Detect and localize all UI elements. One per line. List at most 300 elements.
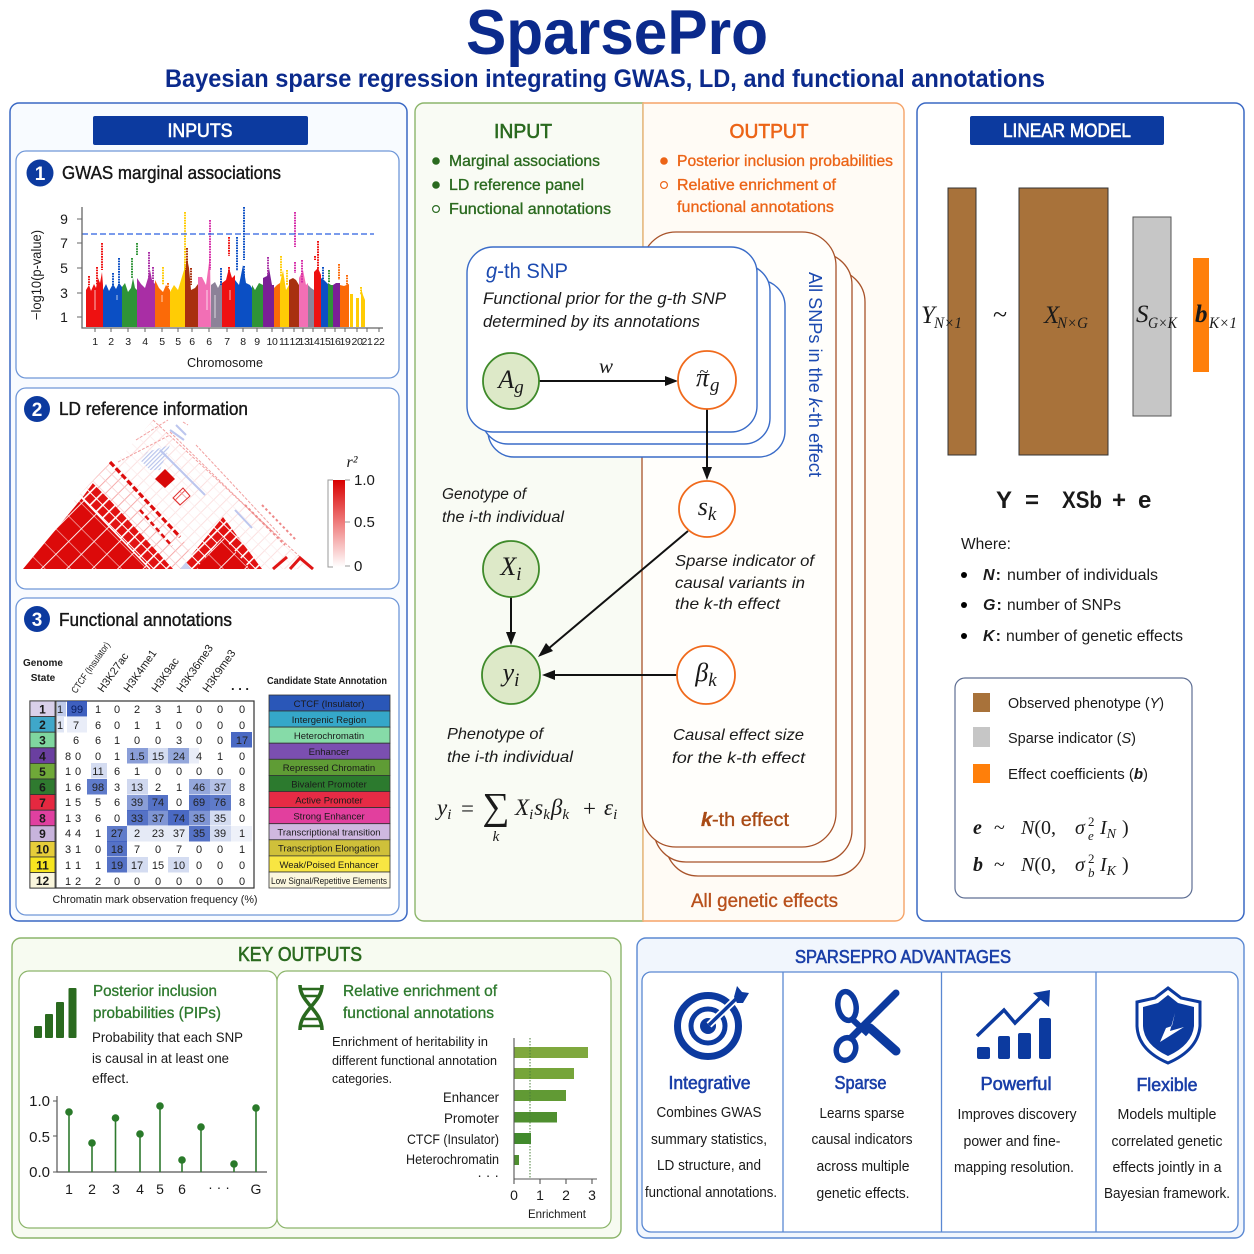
heatmap values: 4 xyxy=(196,751,202,763)
text: functional prior: determined by its annotations xyxy=(483,312,700,331)
chart: lollipop xyxy=(29,1093,267,1197)
chart: lollipop: 1.0 xyxy=(29,1093,50,1110)
heatmap values: 0 xyxy=(114,876,120,888)
icon: scissors xyxy=(833,990,896,1063)
equation: Y = XSb + e: + xyxy=(1112,487,1126,514)
equation: Y = XSb + e: XSb xyxy=(1062,487,1102,514)
heatmap values: 0 xyxy=(239,876,245,888)
arrow: A to pi xyxy=(539,376,678,386)
chart: lollipop: G xyxy=(251,1181,261,1197)
chart: Manhattan plot: 10 xyxy=(267,336,278,348)
chart: enrichment bars: 1 xyxy=(536,1187,544,1203)
icon: target xyxy=(678,986,749,1056)
chart: Manhattan plot: 5 xyxy=(159,336,165,348)
chart: Manhattan plot: 5 xyxy=(175,336,181,348)
heatmap values: 0 xyxy=(217,860,223,872)
panel: GWAS marginal associations xyxy=(16,151,399,378)
description: PIPs: is causal in at least one xyxy=(92,1050,229,1066)
heatmap values: 0 xyxy=(217,735,223,747)
caption: sparse indicator: the k-th effect xyxy=(675,596,781,613)
heatmap values: 0 xyxy=(196,720,202,732)
heatmap values: 39 xyxy=(214,828,226,840)
caption: genotype: the i-th individual xyxy=(442,509,565,526)
heatmap values: 1 xyxy=(114,735,120,747)
genome state label xyxy=(23,658,63,684)
label: k-th effect: k-th effect xyxy=(701,810,790,831)
candidate state annotation list: Strong Enhancer xyxy=(293,812,365,822)
heatmap values: 0 xyxy=(217,704,223,716)
heatmap values: 0 xyxy=(196,860,202,872)
equation: y_i sum: k xyxy=(562,807,569,823)
arrow: beta to y xyxy=(542,670,677,680)
distribution: b xyxy=(973,851,1129,880)
chart: Manhattan plot: 5 xyxy=(60,260,68,276)
chart: Manhattan plot: 21 xyxy=(362,336,373,348)
caption: phenotype: Phenotype of xyxy=(447,726,545,743)
node: A_g: g xyxy=(514,377,524,398)
chart: enrichment bars: Enrichment xyxy=(528,1207,587,1221)
chart: Manhattan plot: 3 xyxy=(60,285,68,301)
column: integrative: Integrative xyxy=(668,1073,750,1093)
caption: phenotype xyxy=(447,726,573,766)
chromatin mark column labels: H3K27ac xyxy=(96,650,132,695)
heatmap values: 3 xyxy=(155,704,161,716)
chart: lollipop: 0.0 xyxy=(29,1164,50,1181)
node: A_g xyxy=(483,353,539,409)
column: sparse: genetic effects. xyxy=(816,1186,910,1202)
heatmap values xyxy=(57,704,248,888)
chromatin mark column labels: H3K36me3 xyxy=(175,643,216,695)
heatmap values: 19 xyxy=(111,860,123,872)
equation: Y = XSb + e: e xyxy=(1138,487,1151,514)
candidate state annotation list xyxy=(269,695,390,888)
column: powerful: Powerful xyxy=(980,1074,1052,1094)
heatmap values: 2 xyxy=(155,782,161,794)
heading: LD: LD reference information xyxy=(59,399,248,419)
equation: y_i sum: β xyxy=(550,795,563,820)
heatmap values: 0 xyxy=(196,876,202,888)
heatmap values: 0 xyxy=(155,735,161,747)
heatmap values: 1 xyxy=(239,828,245,840)
heatmap values: 6 xyxy=(95,720,101,732)
column: sparse: Sparse xyxy=(834,1073,886,1093)
chart: enrichment bars: Enhancer xyxy=(443,1089,499,1105)
equation: y_i sum xyxy=(435,786,617,845)
heatmap values: 1 xyxy=(57,704,63,716)
distribution: b: σ xyxy=(1075,854,1086,876)
chart: enrichment bars: 2 xyxy=(562,1187,570,1203)
heatmap values: 1 xyxy=(155,720,161,732)
chart: Manhattan plot: 11 xyxy=(279,336,290,348)
description: PIPs: effect. xyxy=(92,1070,129,1086)
panel: graphical model xyxy=(415,103,904,921)
chromatin mark column labels: H3K4me1 xyxy=(122,648,160,695)
candidate state annotation list: Repressed Chromatin xyxy=(283,763,375,774)
state number cells: 7 xyxy=(39,796,46,810)
equation: Y = XSb + e: = xyxy=(1025,487,1039,514)
equation: y_i sum: i xyxy=(447,807,451,823)
matrix S xyxy=(1133,217,1171,416)
chart: lollipop: 5 xyxy=(156,1181,164,1197)
distribution: b: b xyxy=(973,854,983,876)
chart: Manhattan plot: 2 xyxy=(108,336,114,348)
equation: y_i sum: ε xyxy=(604,795,613,820)
heatmap values: 6 xyxy=(95,735,101,747)
icon: rising chart xyxy=(977,990,1051,1059)
heatmap values: 1 xyxy=(217,751,223,763)
chart: enrichment bars: · · · xyxy=(477,1167,499,1183)
equation: y_i sum: + xyxy=(583,796,596,821)
heatmap values: 0 xyxy=(196,844,202,856)
legend: r squared colourbar: 0 xyxy=(354,558,362,575)
chart: Manhattan plot: 22 xyxy=(374,336,385,348)
heatmap values: 3 xyxy=(75,813,81,825)
heatmap values: 33 xyxy=(131,813,143,825)
chart: enrichment bars: 3 xyxy=(588,1187,596,1203)
legend: r squared colourbar: 0.5 xyxy=(354,514,375,531)
matrix X xyxy=(1019,188,1108,455)
output list xyxy=(660,121,893,216)
heatmap values: 18 xyxy=(111,844,123,856)
distribution: e: N(0, xyxy=(1020,817,1056,839)
heatmap values: 76 xyxy=(214,797,226,809)
node: beta_k: β xyxy=(695,658,708,687)
description: enrichment: different functional annotation xyxy=(332,1053,497,1068)
heading: GWAS: GWAS marginal associations xyxy=(62,163,281,183)
chart: Manhattan plot: 1 xyxy=(92,336,98,348)
chart: enrichment bars: CTCF (Insulator) xyxy=(407,1131,499,1147)
candidate state annotation list: Active Promoter xyxy=(295,796,363,806)
heatmap values: 15 xyxy=(152,751,164,763)
node: pi_g: ~ xyxy=(699,362,709,381)
heatmap values: 3 xyxy=(114,782,120,794)
heatmap values: 1 xyxy=(239,844,245,856)
subtitle: Bayesian sparse regression integrating GWAS, LD, and functional annotations xyxy=(165,65,1045,93)
card: relative enrichment xyxy=(277,971,611,1228)
heatmap values: 69 xyxy=(193,797,205,809)
matrix labels: b xyxy=(1195,301,1208,328)
heatmap values: 0 xyxy=(196,704,202,716)
heatmap values: 8 xyxy=(65,751,71,763)
plate: all genetic effects xyxy=(642,232,865,876)
label: all SNPs vertical: All SNPs in the k -th effect xyxy=(805,272,825,477)
column: sparse xyxy=(812,990,912,1202)
heatmap values: 4 xyxy=(75,828,81,840)
node: pi_g: π xyxy=(696,363,710,392)
legend box: Observed phenotype (Y) xyxy=(1008,695,1164,712)
chart: Manhattan plot: 12 xyxy=(290,336,301,348)
panel: inputs xyxy=(10,103,407,921)
chart: enrichment bars: 0 xyxy=(510,1187,518,1203)
candidate state annotation list: Low Signal/Repetitive Elements xyxy=(271,876,387,887)
number badge 3: 3 xyxy=(32,610,42,631)
state number cells: 9 xyxy=(39,827,46,841)
chart: Manhattan plot: 16 xyxy=(330,336,341,348)
legend box: Sparse indicator (S) xyxy=(1008,730,1136,747)
output list: Relative enrichment of xyxy=(677,177,837,194)
panel: linear model xyxy=(917,103,1244,921)
inputs header: INPUTS xyxy=(168,121,232,142)
node: X_i: X xyxy=(500,552,516,581)
distribution: b: 2 xyxy=(1088,851,1094,866)
heatmap values: 3 xyxy=(65,844,71,856)
text: functional prior: Functional prior for the g-th SNP xyxy=(483,289,727,308)
card: posterior inclusion probabilities xyxy=(19,971,277,1228)
chart: Manhattan plot: 1 xyxy=(60,309,68,325)
chart: enrichment bars: Promoter xyxy=(444,1110,499,1126)
legend: r squared colourbar: r² xyxy=(346,454,359,471)
heatmap values: 13 xyxy=(131,782,143,794)
chart: Manhattan plot: 3 xyxy=(125,336,131,348)
label: all genetic effects: All genetic effects xyxy=(691,891,838,912)
column: powerful: Improves discovery xyxy=(958,1107,1077,1123)
matrix labels: G×K xyxy=(1148,315,1178,332)
number badge 1: 1 xyxy=(35,164,46,185)
node: y_i xyxy=(482,646,540,704)
heatmap table xyxy=(30,701,254,888)
heatmap values: 0 xyxy=(217,844,223,856)
chromatin mark column labels: H3K9me3 xyxy=(201,648,239,695)
heatmap values: 35 xyxy=(193,828,205,840)
candidate state annotation list: Transcription Elongation xyxy=(278,844,380,854)
axis label: chromosome: Chromosome xyxy=(187,355,263,370)
definitions list: number of genetic effects xyxy=(1006,628,1183,645)
definitions list: number of SNPs xyxy=(1007,597,1121,614)
caption: genotype xyxy=(442,486,565,526)
description: PIPs: Probability that each SNP xyxy=(92,1029,243,1045)
chart: Manhattan plot: 19 xyxy=(340,336,351,348)
heatmap values: 6 xyxy=(95,813,101,825)
panel: advantages xyxy=(637,938,1244,1238)
column: sparse: Learns sparse xyxy=(820,1106,904,1122)
matrix labels: S xyxy=(1136,301,1149,328)
heatmap values: 23 xyxy=(152,828,164,840)
state number cells: 5 xyxy=(39,765,46,779)
node: beta_k: k xyxy=(708,670,717,691)
column: integrative: LD structure, and xyxy=(657,1158,761,1174)
definitions list: K: xyxy=(983,628,1001,645)
heatmap values: 8 xyxy=(239,797,245,809)
number badge 3 xyxy=(24,606,50,632)
heatmap values: 4 xyxy=(65,828,71,840)
inputs header xyxy=(93,116,308,145)
heatmap values: 15 xyxy=(152,860,164,872)
heatmap values: 0 xyxy=(239,813,245,825)
title: SparsePro xyxy=(466,0,768,68)
label: w: w xyxy=(599,354,613,378)
legend: r squared colourbar: 1.0 xyxy=(354,472,375,489)
state number cells: 6 xyxy=(39,780,46,794)
chromatin mark column labels: H3K9ac xyxy=(150,655,182,695)
distribution: b: ) xyxy=(1122,854,1129,876)
heatmap values: 0 xyxy=(95,751,101,763)
heatmap values: 6 xyxy=(73,735,79,747)
chart: Manhattan plot: 9 xyxy=(254,336,260,348)
caption: causal effect size xyxy=(672,727,806,767)
heatmap values: 0 xyxy=(155,766,161,778)
caption: genotype: Genotype of xyxy=(442,486,528,503)
chart: lollipop: · · · xyxy=(208,1179,230,1195)
heatmap values: 17 xyxy=(236,735,248,747)
heatmap values: 5 xyxy=(95,797,101,809)
panel: functional annotations xyxy=(16,598,399,915)
legend box: Effect coefficients (b) xyxy=(1008,766,1148,783)
heatmap values: 37 xyxy=(173,828,185,840)
description: enrichment xyxy=(332,1034,497,1086)
equation: y_i sum: k xyxy=(543,807,550,823)
chromatin mark column labels: . . . xyxy=(231,678,249,693)
distribution: b: N(0, xyxy=(1020,854,1056,876)
input list: Functional annotations xyxy=(449,201,611,218)
icon: DNA xyxy=(299,985,323,1030)
heatmap values: 1 xyxy=(95,860,101,872)
heatmap values: 8 xyxy=(239,782,245,794)
candidate state annotation list: Weak/Poised Enhancer xyxy=(279,860,379,871)
heatmap values: 27 xyxy=(111,828,123,840)
chart: Manhattan plot: 6 xyxy=(206,336,212,348)
chart: Manhattan plot: 20 xyxy=(352,336,363,348)
heatmap values: 11 xyxy=(92,766,104,778)
heatmap values: 1 xyxy=(65,860,71,872)
heatmap values: 3 xyxy=(176,735,182,747)
column: integrative: functional annotations. xyxy=(645,1185,777,1201)
heatmap values: 1 xyxy=(65,766,71,778)
equation: y_i sum: X xyxy=(515,795,529,820)
heading: PIPs: probabilities (PIPs) xyxy=(93,1005,221,1022)
heatmap values: 0 xyxy=(239,860,245,872)
heatmap values: 0 xyxy=(114,704,120,716)
definitions list: Where: xyxy=(961,536,1011,553)
description: enrichment: categories. xyxy=(332,1071,392,1086)
candidate state annotation list: CTCF (Insulator) xyxy=(294,699,364,710)
matrix labels: X xyxy=(1043,302,1061,329)
arrow: X to y xyxy=(506,597,516,645)
node: s_k: k xyxy=(708,504,717,525)
chart: lollipop: 1 xyxy=(65,1181,73,1197)
heatmap values: 7 xyxy=(176,844,182,856)
number badge 2 xyxy=(24,396,50,422)
equation: Y = XSb + e: Y xyxy=(996,487,1012,514)
heatmap values: 1 xyxy=(134,766,140,778)
node: beta_k xyxy=(677,646,735,704)
node: A_g: A xyxy=(498,365,514,394)
chart: Manhattan plot: 8 xyxy=(240,336,246,348)
chart: Manhattan plot: 15 xyxy=(320,336,331,348)
heatmap values: 6 xyxy=(114,797,120,809)
distribution: e: N xyxy=(1106,827,1117,842)
icon: shield xyxy=(1137,988,1200,1063)
node: pi_g xyxy=(678,351,736,409)
column: flexible: Models multiple xyxy=(1118,1107,1216,1123)
heatmap values: 0 xyxy=(217,876,223,888)
distribution: e: ~ xyxy=(994,817,1005,839)
state number cells: 12 xyxy=(36,874,49,888)
chromatin mark column labels xyxy=(69,640,249,696)
matrix labels xyxy=(921,300,1237,332)
chart: Manhattan plot: 9 xyxy=(60,211,68,227)
state number cells xyxy=(30,701,55,888)
significance line xyxy=(82,233,374,235)
heatmap values: 0 xyxy=(134,876,140,888)
heatmap values: 2 xyxy=(75,876,81,888)
distribution: b: b xyxy=(1088,865,1095,880)
heatmap values: 1 xyxy=(114,751,120,763)
input list: Marginal associations xyxy=(449,153,600,170)
heatmap values: 17 xyxy=(131,860,143,872)
heatmap values: 1 xyxy=(95,828,101,840)
node: X_i xyxy=(483,541,539,597)
heatmap values: 2 xyxy=(134,704,140,716)
heatmap values: 39 xyxy=(131,797,143,809)
distribution: e xyxy=(973,814,1129,843)
heatmap values: 98 xyxy=(92,782,104,794)
linear model header: LINEAR MODEL xyxy=(1003,121,1131,142)
heatmap values: 0 xyxy=(114,813,120,825)
heatmap values: 0 xyxy=(134,735,140,747)
heatmap values: 0 xyxy=(239,720,245,732)
heatmap values: 1 xyxy=(57,720,63,732)
chart: Manhattan plot: 7 xyxy=(60,235,68,251)
candidate state annotation list: Bivalent Promoter xyxy=(291,780,367,790)
matrix labels: ~ xyxy=(993,300,1007,329)
chart: enrichment bars: Heterochromatin xyxy=(406,1151,499,1167)
column: powerful: mapping resolution. xyxy=(954,1160,1074,1176)
column: integrative xyxy=(645,986,777,1201)
heatmap values: 0 xyxy=(155,876,161,888)
state number cells: 4 xyxy=(39,750,46,764)
distribution: e: ) xyxy=(1122,817,1129,839)
node: X_i: i xyxy=(516,564,522,585)
input list xyxy=(432,121,611,218)
column: sparse: causal indicators xyxy=(812,1132,912,1148)
candidate state annotation list: Intergenic Region xyxy=(292,715,366,726)
heatmap values: 10 xyxy=(173,860,185,872)
column: flexible xyxy=(1104,988,1230,1202)
equation: y_i sum: i xyxy=(613,807,617,823)
chart: lollipop: 6 xyxy=(178,1181,186,1197)
column: integrative: summary statistics, xyxy=(651,1132,767,1148)
distribution: b: I xyxy=(1100,854,1107,876)
heatmap values: 0 xyxy=(176,876,182,888)
genome state label: State xyxy=(31,673,56,684)
definitions list xyxy=(961,536,1183,645)
heatmap values: 6 xyxy=(75,782,81,794)
chart: Manhattan plot xyxy=(29,207,385,370)
column: integrative: Combines GWAS xyxy=(656,1105,762,1121)
distribution: e: e xyxy=(1088,828,1094,843)
heading: enrichment: functional annotations xyxy=(343,1005,494,1022)
heatmap values: 0 xyxy=(239,766,245,778)
chart: Manhattan plot: 6 xyxy=(189,336,195,348)
column: flexible: effects jointly in a xyxy=(1112,1160,1222,1176)
caption: causal effect size: Causal effect size xyxy=(673,727,804,744)
node: y_i: i xyxy=(514,670,519,691)
column: sparse: across multiple xyxy=(816,1159,910,1175)
chart: Manhattan plot: 7 xyxy=(224,336,230,348)
distribution: b: ~ xyxy=(994,854,1005,876)
definitions list: number of individuals xyxy=(1007,567,1158,584)
node: s_k: s xyxy=(698,492,708,521)
caption: causal effect size: for the k-th effect xyxy=(672,750,806,767)
axis label: -log10(p-value): −log10(p-value) xyxy=(29,230,44,320)
heatmap values: 1.5 xyxy=(129,751,145,763)
heatmap values: 1 xyxy=(65,797,71,809)
heatmap values: 2 xyxy=(95,876,101,888)
caption: sparse indicator: Sparse indicator of xyxy=(675,553,816,570)
heading: enrichment: Relative enrichment of xyxy=(343,983,498,1000)
caption: phenotype: the i-th individual xyxy=(447,749,573,766)
distribution: e: e xyxy=(973,817,982,839)
